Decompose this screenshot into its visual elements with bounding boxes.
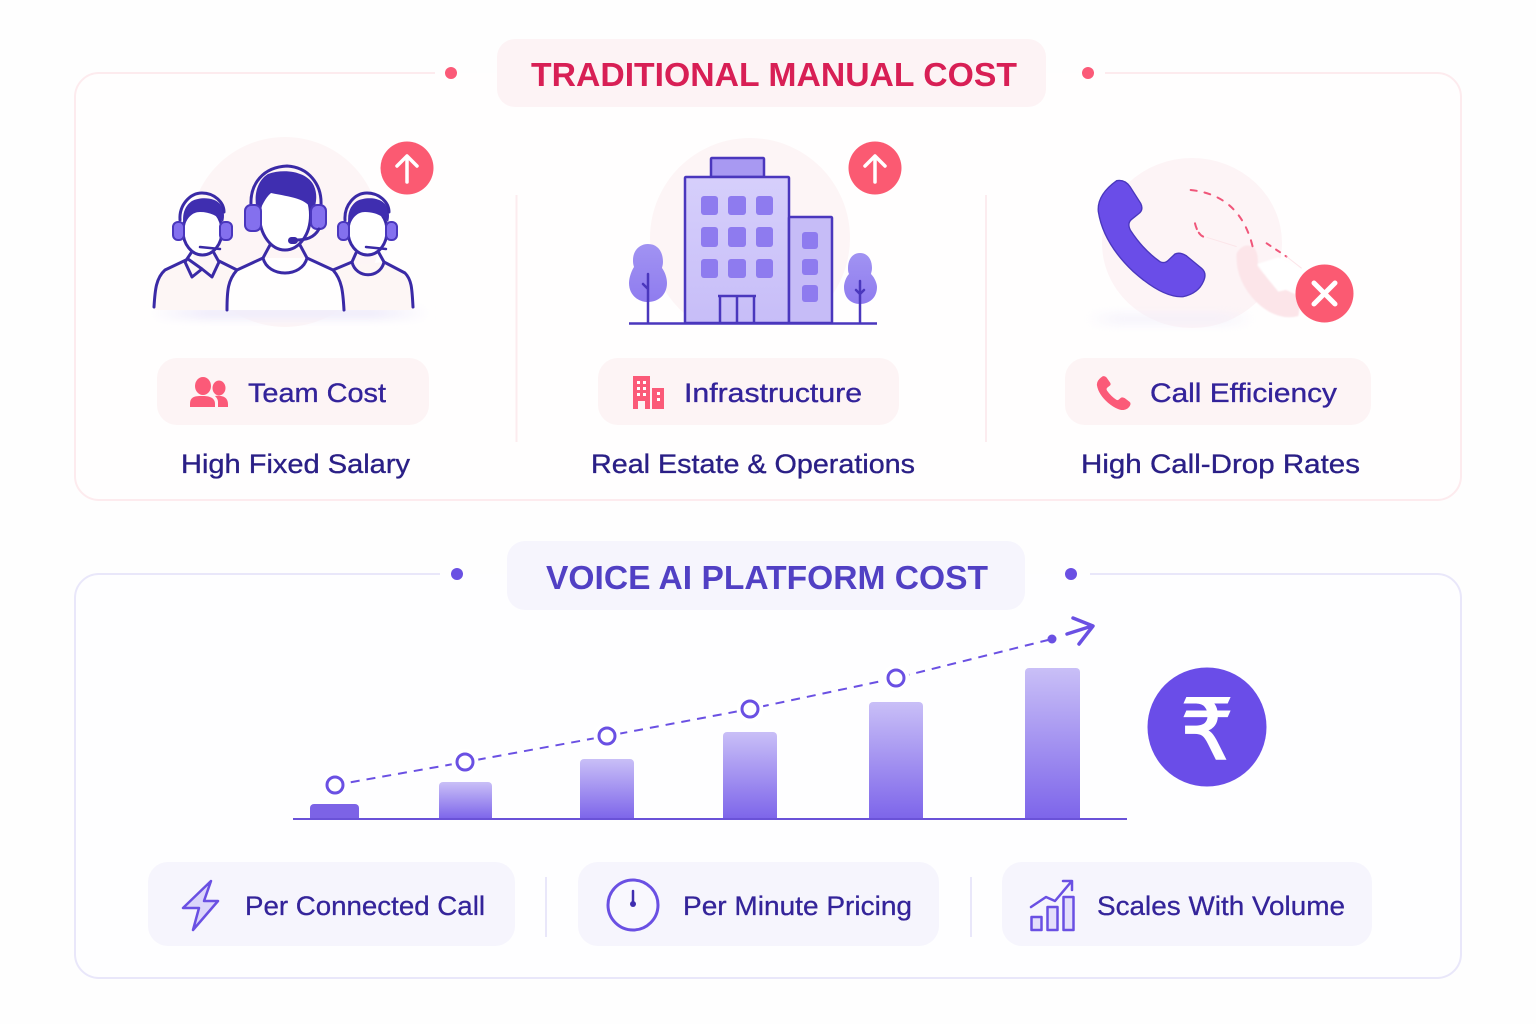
icon: building xyxy=(632,376,664,409)
icon: phone xyxy=(1097,376,1131,410)
panel border: voice ai xyxy=(75,574,1461,978)
label pill: call efficiency: Call Efficiency xyxy=(1150,378,1338,408)
feature pill: per connected call xyxy=(148,862,515,946)
feature pill: scales with volume: Scales With Volume xyxy=(1097,891,1345,921)
heading pill: voice ai platform cost xyxy=(451,541,1077,610)
illustration: office building xyxy=(629,138,877,338)
icon: growth chart xyxy=(1031,881,1074,930)
label pill: infrastructure: Infrastructure xyxy=(684,378,862,408)
icon: rupee coin xyxy=(1148,668,1266,786)
bars xyxy=(310,668,1080,819)
caption: high fixed salary: High Fixed Salary xyxy=(181,449,411,479)
illustration: dropped call xyxy=(1085,158,1302,328)
icon: clock xyxy=(608,880,658,930)
windows xyxy=(701,196,818,302)
caption: high call-drop rates: High Call-Drop Rates xyxy=(1081,449,1360,479)
label pill: team cost: Team Cost xyxy=(248,378,387,408)
feature pill: scales with volume xyxy=(1002,862,1372,946)
bar chart: rising cost with volume xyxy=(293,618,1127,819)
feature pill: per connected call: Per Connected Call xyxy=(245,891,485,921)
label pill: call efficiency xyxy=(1065,358,1371,425)
trees xyxy=(629,244,877,323)
centre agent xyxy=(227,166,344,310)
panel: traditional manual cost xyxy=(75,39,1461,500)
icon: lightning bolt xyxy=(183,881,218,930)
left agent xyxy=(154,193,240,310)
feature pill: per minute pricing xyxy=(578,862,939,946)
panel border: traditional xyxy=(75,73,1461,500)
ghost handset xyxy=(1237,245,1302,317)
handset xyxy=(1098,180,1205,297)
icon: rupee coin: ₹ xyxy=(1180,681,1234,779)
heading pill: traditional manual cost xyxy=(445,39,1094,107)
badge: call failed xyxy=(1296,264,1354,322)
badge: team cost rising xyxy=(380,142,434,194)
signal dashes xyxy=(1191,190,1287,257)
heading pill: traditional manual cost: TRADITIONAL MANUAL COST xyxy=(531,56,1017,93)
illustration: call centre team xyxy=(150,137,430,327)
label pill: team cost xyxy=(157,358,429,425)
trend line xyxy=(326,618,1093,794)
feature pill: per minute pricing: Per Minute Pricing xyxy=(683,891,912,921)
heading pill: voice ai platform cost: VOICE AI PLATFORM COST xyxy=(546,559,988,596)
caption: real estate and operations: Real Estate & Operations xyxy=(591,449,915,479)
icon: people xyxy=(190,377,228,407)
label pill: infrastructure xyxy=(598,358,899,425)
right agent xyxy=(330,193,413,310)
badge: infrastructure cost rising xyxy=(848,142,902,194)
panel: voice ai platform cost xyxy=(75,541,1461,978)
